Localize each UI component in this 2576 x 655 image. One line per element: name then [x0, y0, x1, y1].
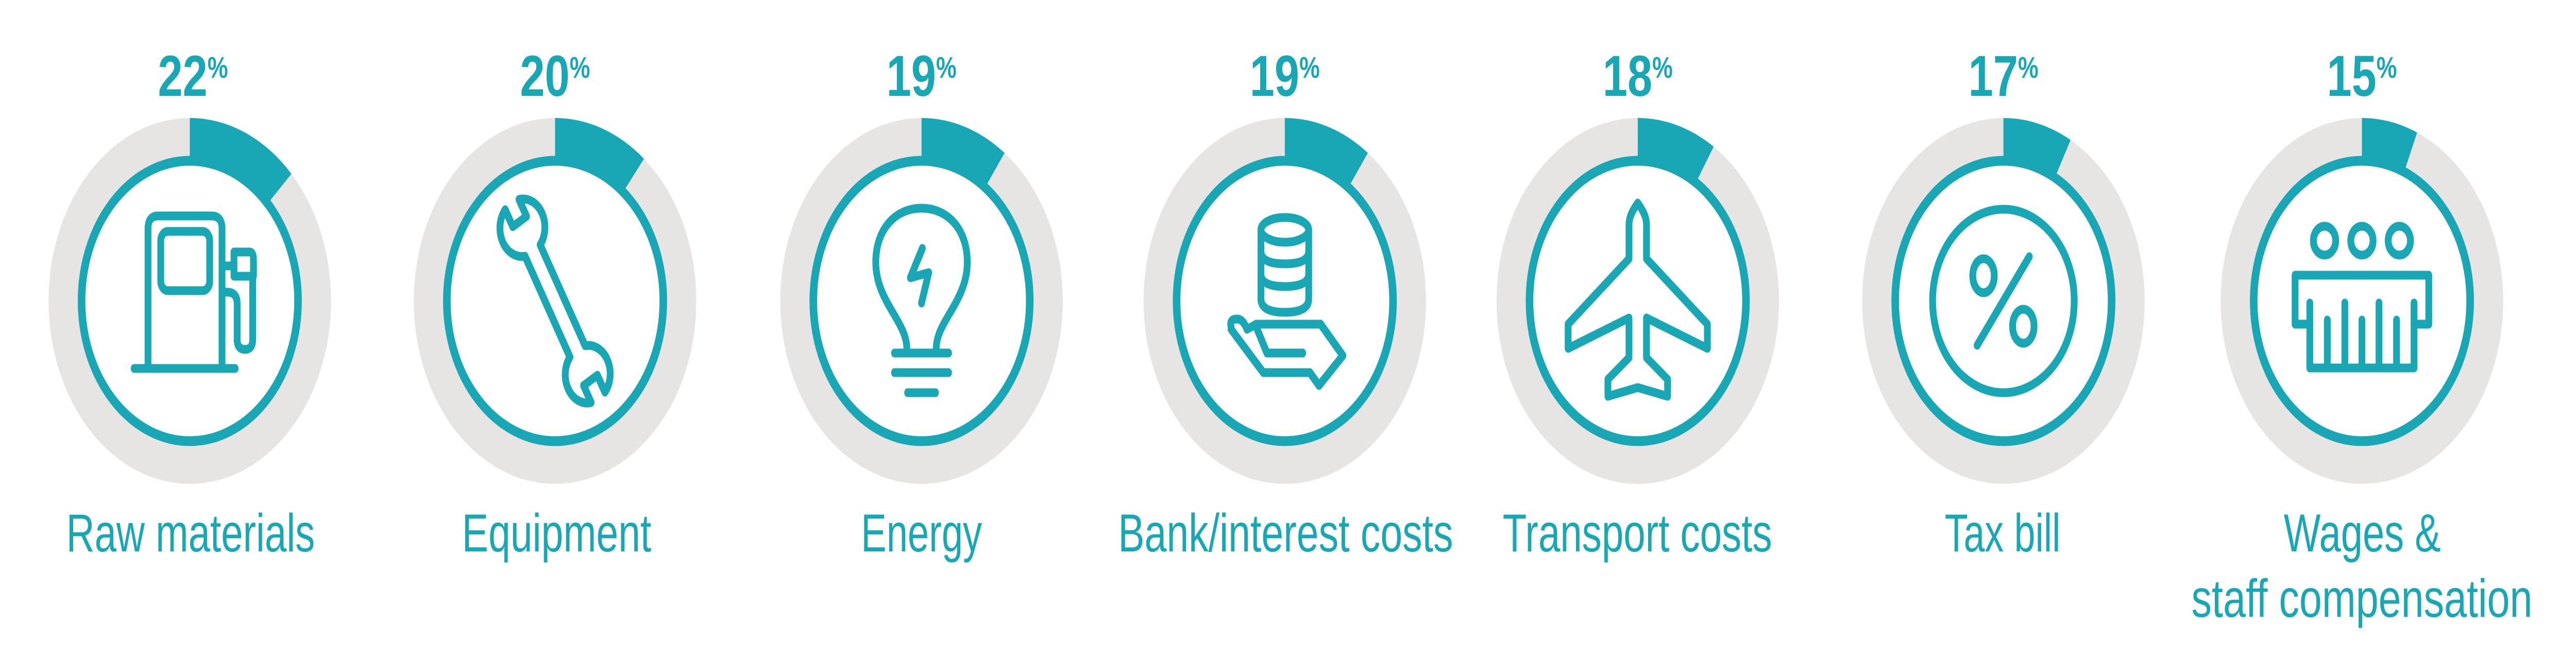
label: tax bill: Tax bill	[1945, 503, 2060, 563]
donut: equipment	[414, 118, 697, 484]
panel: tax bill	[1862, 44, 2145, 563]
percentage: 20%: 20	[520, 44, 570, 109]
percentage: 19%: 19	[887, 44, 936, 109]
percentage: 19%: 19	[1250, 44, 1299, 109]
label: wages & staff compensation: staff compensation	[2192, 568, 2532, 628]
panel: transport costs	[1497, 44, 1779, 563]
donut: bank	[1144, 118, 1426, 484]
panel: bank/interest costs	[1118, 44, 1453, 563]
label: energy: Energy	[861, 503, 982, 563]
percentage: 19%: %	[936, 51, 957, 84]
percentage: 17%: %	[2018, 51, 2039, 84]
label: raw materials: Raw materials	[66, 503, 315, 563]
donut: wages	[2221, 118, 2503, 484]
donut: energy	[781, 118, 1063, 484]
panel: wages & staff compensation	[2192, 44, 2532, 628]
donut: raw materials	[48, 118, 331, 484]
label: bank/interest costs: Bank/interest costs	[1118, 503, 1453, 563]
percentage: 22%: %	[208, 51, 228, 84]
label: transport costs: Transport costs	[1503, 503, 1772, 563]
percentage: 22%: 22	[158, 44, 208, 109]
percentage: 20%: %	[570, 51, 590, 84]
percentage: 19%: %	[1299, 51, 1320, 84]
donut: transport	[1497, 118, 1779, 484]
panel: equipment	[414, 44, 697, 563]
label: wages & staff compensation: Wages &	[2284, 503, 2441, 563]
percentage: 18%: %	[1652, 51, 1673, 84]
donut: tax	[1862, 118, 2145, 484]
percentage: 18%: 18	[1603, 44, 1652, 109]
icon: wages/people	[2295, 226, 2429, 368]
percentage: 15%: %	[2377, 51, 2397, 84]
icon: coins in hand	[1231, 217, 1343, 385]
panel: energy	[781, 44, 1063, 563]
percentage: 15%: 15	[2327, 44, 2377, 109]
icon: light bulb	[876, 208, 968, 393]
icon: airplane	[1568, 203, 1707, 396]
label: equipment: Equipment	[462, 503, 651, 563]
panel: raw materials	[48, 44, 331, 563]
icon: fuel pump	[134, 216, 253, 368]
icon: percent circle	[1933, 209, 2074, 393]
percentage: 17%: 17	[1969, 44, 2018, 109]
icon: wrench	[493, 190, 618, 412]
